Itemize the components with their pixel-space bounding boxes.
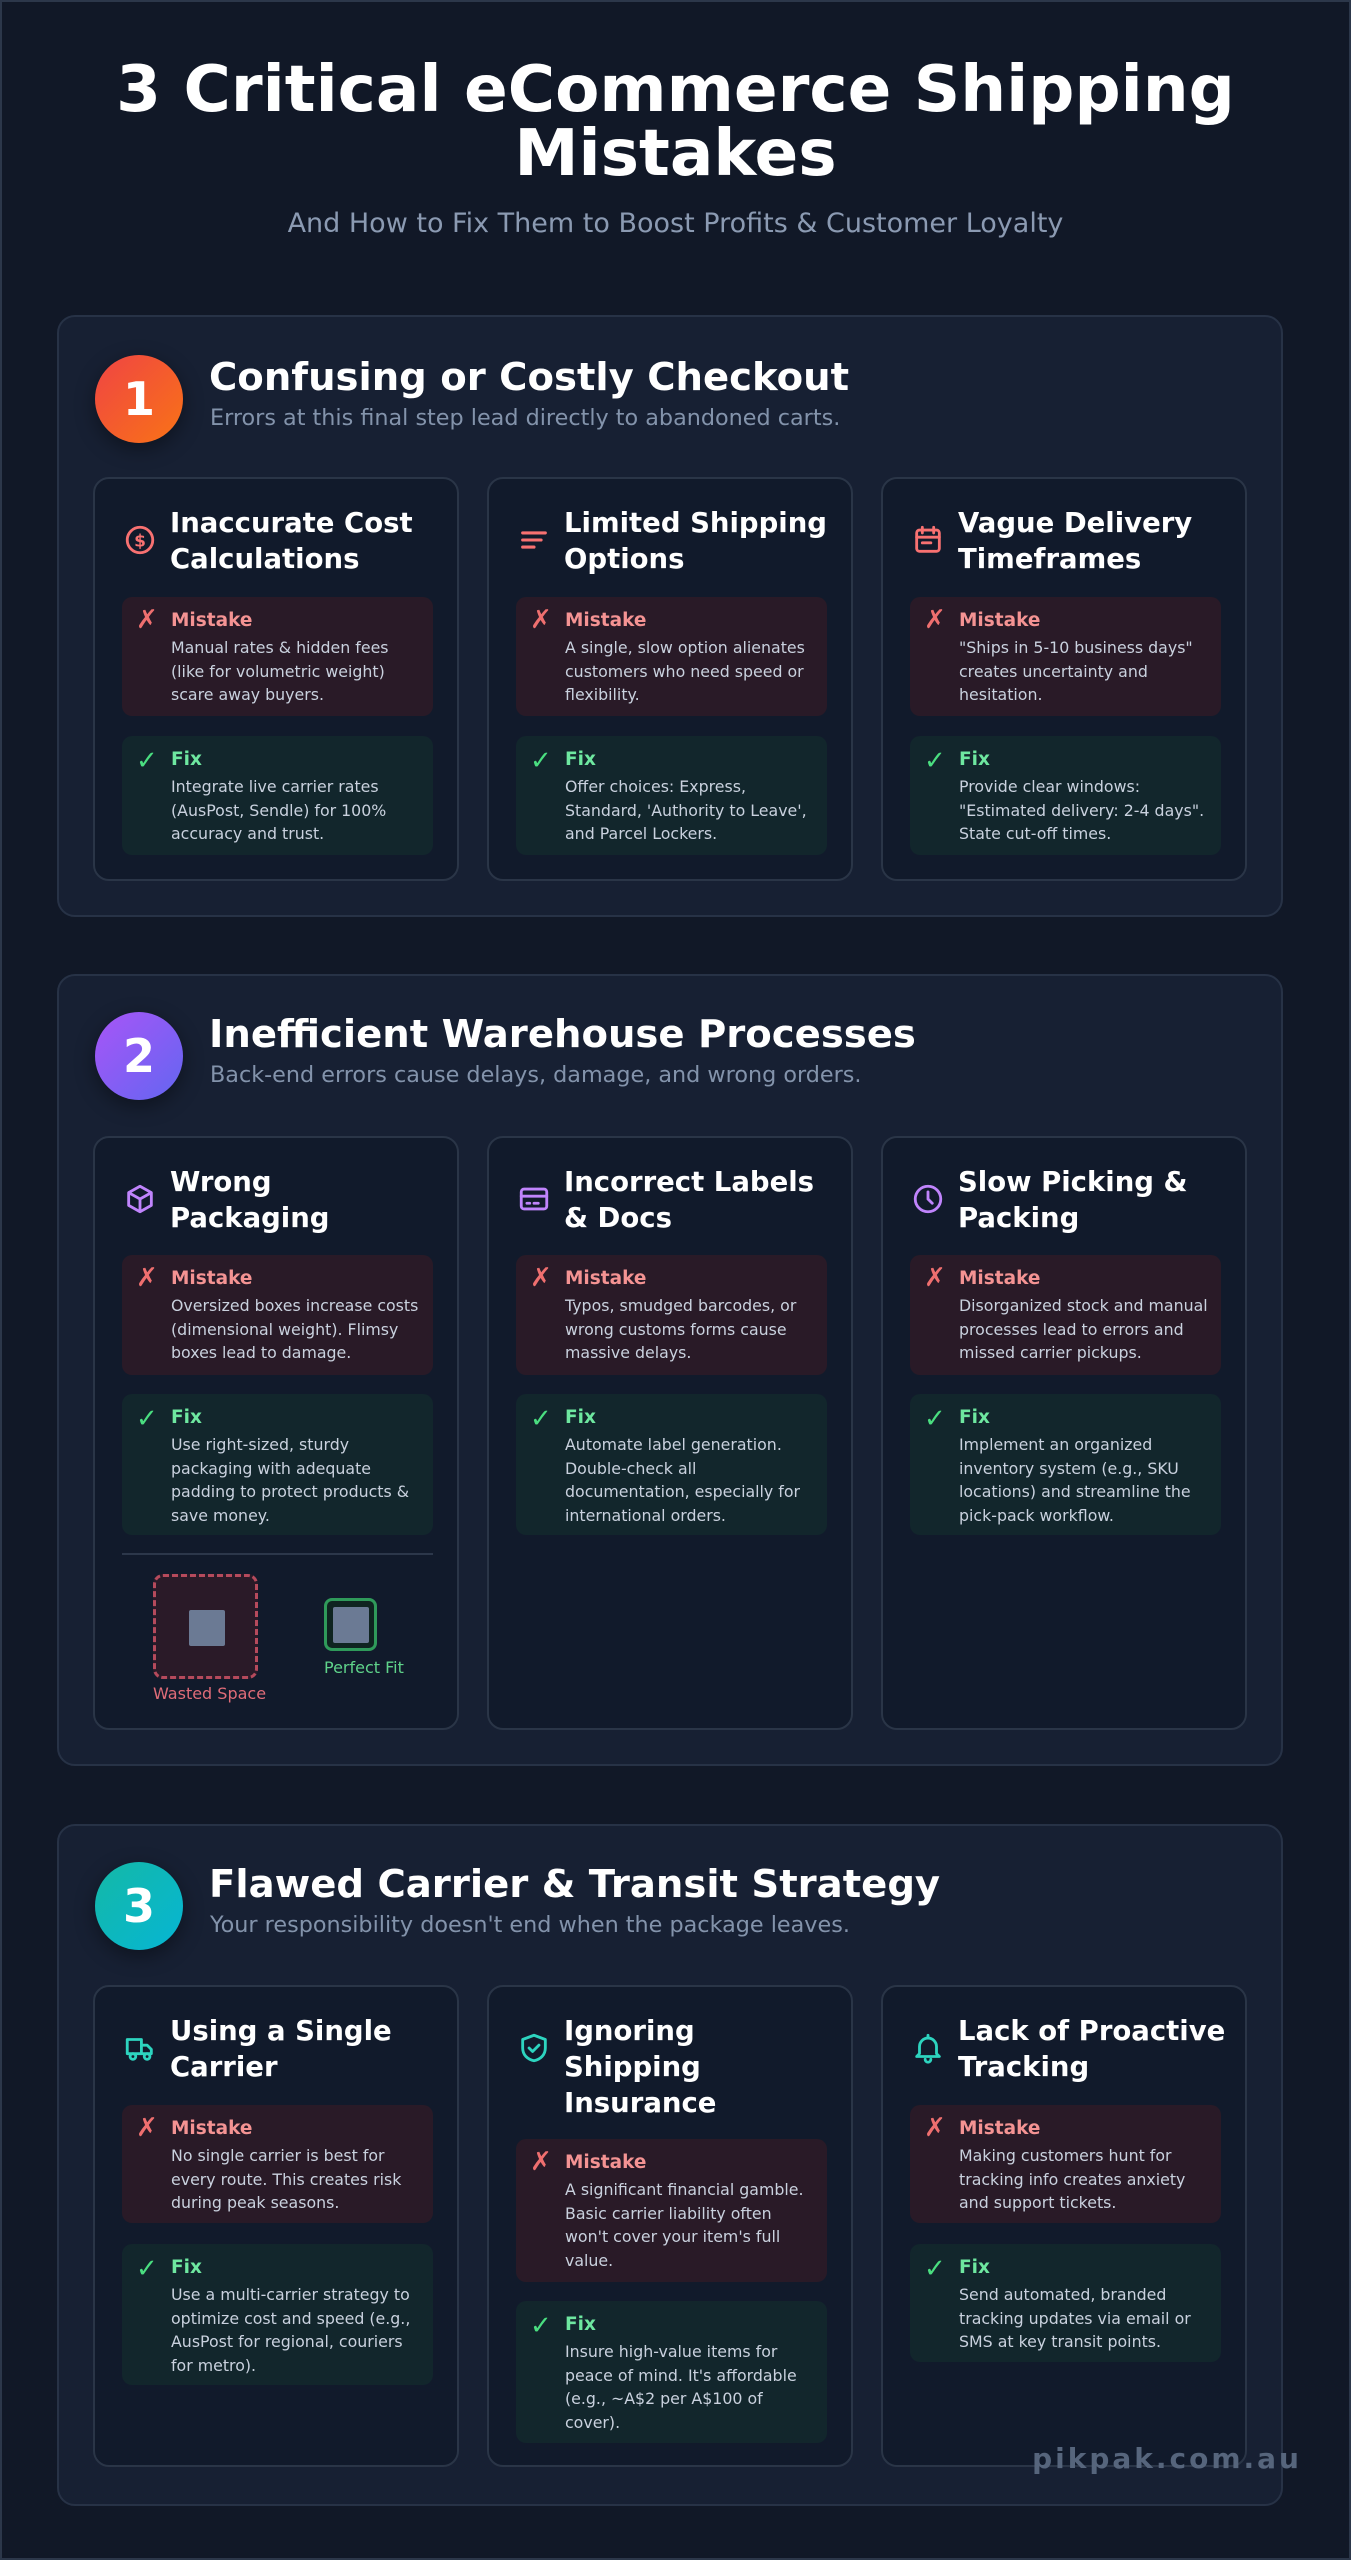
card title: [564, 1166, 814, 1234]
badge 3: [95, 1862, 183, 1950]
title: [116, 52, 1235, 191]
mistake box: [122, 2105, 433, 2223]
badge 1: 1: [123, 372, 155, 426]
card title: [958, 1166, 1188, 1234]
panel: section 1 checkout: [57, 315, 1283, 917]
mistake box: ✗: [136, 605, 158, 635]
icon: box: [127, 1184, 153, 1214]
badge 3: 3: [123, 1879, 155, 1933]
mistake box: "Ships in 5-10 business days": [959, 638, 1193, 657]
fix box: Fix: [565, 1407, 596, 1428]
mistake box: scare away buyers.: [171, 685, 324, 704]
icon: shield: [521, 2034, 547, 2062]
mistake box: Mistake: [565, 610, 646, 631]
mistake box: Mistake: [171, 610, 252, 631]
fix box: ✓: [530, 2311, 552, 2341]
card: proactive tracking: [881, 1985, 1247, 2467]
mistake box: boxes lead to damage.: [171, 1343, 351, 1362]
fix box: tracking updates via email or: [959, 2308, 1191, 2328]
mistake box: [516, 1255, 827, 1375]
fix box: Fix: [171, 749, 202, 770]
watermark: pikpak.com.au: [1032, 2442, 1302, 2475]
mistake box: ✗: [530, 2147, 552, 2177]
mistake box: hesitation.: [959, 685, 1043, 704]
illustration: perfect fit: [324, 1598, 404, 1677]
mistake box: Mistake: [959, 610, 1040, 631]
icon: dollar: [126, 526, 154, 554]
icon: clock: [914, 1184, 942, 1214]
fix box: Use right-sized, sturdy: [171, 1435, 349, 1454]
fix box: [516, 1394, 827, 1535]
fix box: save money.: [171, 1506, 270, 1524]
card title: Lack of Proactive: [958, 2015, 1225, 2047]
mistake box: Mistake: [565, 1268, 646, 1289]
card title: Inaccurate Cost: [170, 507, 413, 539]
fix box: ✓: [530, 1404, 552, 1434]
mistake box: [122, 1255, 433, 1375]
fix box: ✓: [924, 1404, 946, 1434]
mistake box: tracking info creates anxiety: [959, 2170, 1185, 2188]
mistake box: [516, 597, 827, 716]
icon: dollar: $: [134, 531, 146, 551]
fix box: Provide clear windows:: [959, 777, 1140, 796]
mistake box: No single carrier is best for: [171, 2146, 385, 2165]
mistake box: [122, 597, 433, 716]
fix box: [516, 736, 827, 855]
card title: Shipping: [564, 2051, 701, 2083]
fix box: [910, 2244, 1221, 2362]
fix box: inventory system (e.g., SKU: [959, 1458, 1179, 1478]
illustration: wasted space: Wasted Space: [153, 1684, 266, 1703]
card title: Tracking: [958, 2051, 1089, 2083]
fix box: State cut-off times.: [959, 824, 1111, 843]
mistake box: (like for volumetric weight): [171, 662, 385, 680]
mistake box: and support tickets.: [959, 2193, 1116, 2212]
card title: Packaging: [170, 1202, 330, 1234]
fix box: [516, 2301, 827, 2443]
card: inaccurate cost: [93, 477, 459, 881]
mistake box: ✗: [924, 1263, 946, 1293]
badge 2: [95, 1012, 183, 1100]
mistake box: massive delays.: [565, 1343, 691, 1362]
fix box: Fix: [171, 2257, 202, 2278]
title: 3 Critical eCommerce Shipping: [116, 52, 1235, 127]
mistake box: Mistake: [565, 2152, 646, 2173]
fix box: [122, 736, 433, 855]
mistake box: A significant financial gamble.: [565, 2180, 804, 2199]
subtitle: And How to Fix Them to Boost Profits & Customer Loyalty: [288, 208, 1063, 239]
fix box: (e.g., ~A$2 per A$100 of: [565, 2389, 763, 2408]
card: single carrier: [93, 1985, 459, 2467]
fix box: ✓: [924, 2254, 946, 2284]
heading: section 1: Confusing or Costly Checkout: [209, 355, 849, 400]
fix box: Offer choices: Express,: [565, 777, 746, 796]
illustration: wasted space: [153, 1574, 266, 1703]
mistake box: missed carrier pickups.: [959, 1343, 1142, 1362]
fix box: documentation, especially for: [565, 1482, 800, 1501]
mistake box: creates uncertainty and: [959, 662, 1148, 680]
fix box: Double-check all: [565, 1458, 696, 1478]
heading: section 3: Flawed Carrier & Transit Strategy: [209, 1862, 940, 1907]
icon: bell: [915, 2034, 941, 2064]
illustration: perfect fit: Perfect Fit: [324, 1658, 404, 1677]
card title: Carrier: [170, 2051, 278, 2083]
mistake box: Typos, smudged barcodes, or: [565, 1296, 796, 1315]
panel: section 2 warehouse: [57, 974, 1283, 1766]
heading: section 2: Inefficient Warehouse Processes: [209, 1012, 916, 1057]
mistake box: Mistake: [959, 1268, 1040, 1289]
fix box: optimize cost and speed (e.g.,: [171, 2308, 410, 2328]
card title: Options: [564, 543, 684, 575]
fix box: Fix: [171, 1407, 202, 1428]
fix box: [122, 1394, 433, 1535]
mistake box: flexibility.: [565, 685, 640, 704]
fix box: Automate label generation.: [565, 1435, 782, 1454]
fix box: ✓: [136, 746, 158, 776]
mistake box: customers who need speed or: [565, 662, 804, 680]
subheading: section 2: Back-end errors cause delays, damage, and wrong orders.: [210, 1062, 862, 1088]
mistake box: ✗: [530, 605, 552, 635]
fix box: [910, 1394, 1221, 1535]
mistake box: value.: [565, 2250, 613, 2270]
fix box: Standard, 'Authority to Leave',: [565, 800, 807, 820]
mistake box: (dimensional weight). Flimsy: [171, 1320, 398, 1338]
mistake box: Manual rates & hidden fees: [171, 638, 389, 657]
card title: Insurance: [564, 2087, 716, 2119]
icon: truck: [126, 2038, 153, 2061]
mistake box: during peak seasons.: [171, 2193, 339, 2212]
card title: Timeframes: [958, 543, 1141, 575]
fix box: Fix: [959, 749, 990, 770]
card title: [564, 507, 827, 575]
badge 2: 2: [123, 1029, 155, 1083]
mistake box: ✗: [136, 1263, 158, 1293]
mistake box: [910, 1255, 1221, 1375]
card title: Ignoring: [564, 2015, 695, 2047]
icon: card: [520, 1188, 548, 1210]
mistake box: Disorganized stock and manual: [959, 1296, 1208, 1315]
fix box: Fix: [959, 1407, 990, 1428]
card: slow picking: [881, 1136, 1247, 1730]
fix box: cover).: [565, 2412, 620, 2432]
fix box: padding to protect products &: [171, 1482, 409, 1501]
card title: Calculations: [170, 543, 359, 575]
subheading: section 1: Errors at this final step lead directly to abandoned carts.: [210, 405, 840, 431]
mistake box: [910, 2105, 1221, 2223]
subheading: section 3: Your responsibility doesn't end when the package leaves.: [210, 1912, 850, 1938]
card title: [170, 1166, 330, 1234]
fix box: ✓: [136, 2254, 158, 2284]
fix box: ✓: [530, 746, 552, 776]
fix box: [910, 736, 1221, 855]
mistake box: Oversized boxes increase costs: [171, 1296, 418, 1315]
fix box: locations) and streamline the: [959, 1482, 1191, 1501]
icon: lines: [521, 531, 547, 549]
fix box: Fix: [959, 2257, 990, 2278]
fix box: Insure high-value items for: [565, 2342, 777, 2361]
fix box: pick-pack workflow.: [959, 1506, 1114, 1524]
card title: [170, 2015, 392, 2083]
mistake box: A single, slow option alienates: [565, 638, 805, 657]
mistake box: Making customers hunt for: [959, 2146, 1172, 2165]
card title: Limited Shipping: [564, 507, 827, 539]
fix box: ✓: [136, 1404, 158, 1434]
mistake box: Mistake: [959, 2118, 1040, 2139]
fix box: Use a multi-carrier strategy to: [171, 2285, 410, 2304]
card title: [564, 2015, 716, 2119]
mistake box: ✗: [136, 2113, 158, 2143]
mistake box: Mistake: [171, 1268, 252, 1289]
mistake box: processes lead to errors and: [959, 1320, 1184, 1338]
card: limited shipping options: [487, 477, 853, 881]
card title: Packing: [958, 1202, 1079, 1234]
mistake box: ✗: [924, 2113, 946, 2143]
mistake box: ✗: [530, 1263, 552, 1293]
fix box: ✓: [924, 746, 946, 776]
card: vague delivery: [881, 477, 1247, 881]
fix box: and Parcel Lockers.: [565, 824, 717, 843]
fix box: AusPost for regional, couriers: [171, 2332, 403, 2351]
card title: [170, 507, 413, 575]
fix box: [122, 2244, 433, 2385]
fix box: peace of mind. It's affordable: [565, 2366, 797, 2384]
mistake box: won't cover your item's full: [565, 2227, 780, 2246]
fix box: Implement an organized: [959, 1435, 1152, 1454]
panel: section 3 carrier: [57, 1824, 1283, 2506]
card title: Incorrect Labels: [564, 1166, 814, 1198]
card title: [958, 507, 1192, 575]
card title: & Docs: [564, 1202, 672, 1234]
fix box: accuracy and trust.: [171, 824, 324, 843]
card title: Wrong: [170, 1166, 272, 1198]
fix box: for metro).: [171, 2356, 256, 2374]
card: wrong packaging: [93, 1136, 459, 1730]
card title: Slow Picking &: [958, 1166, 1188, 1198]
card title: [958, 2015, 1225, 2083]
mistake box: Mistake: [171, 2118, 252, 2139]
fix box: (AusPost, Sendle) for 100%: [171, 800, 386, 820]
mistake box: wrong customs forms cause: [565, 1320, 787, 1338]
card: shipping insurance: [487, 1985, 853, 2467]
fix box: "Estimated delivery: 2-4 days".: [959, 800, 1204, 820]
fix box: Integrate live carrier rates: [171, 777, 379, 796]
icon: calendar: [915, 526, 941, 553]
mistake box: ✗: [924, 605, 946, 635]
card: incorrect labels: [487, 1136, 853, 1730]
fix box: Fix: [565, 749, 596, 770]
mistake box: [910, 597, 1221, 716]
badge 1: [95, 355, 183, 443]
title: Mistakes: [514, 116, 837, 191]
fix box: Fix: [565, 2314, 596, 2335]
card title: Vague Delivery: [958, 507, 1192, 539]
mistake box: every route. This creates risk: [171, 2170, 401, 2188]
fix box: Send automated, branded: [959, 2285, 1166, 2304]
fix box: packaging with adequate: [171, 1458, 371, 1478]
fix box: international orders.: [565, 1506, 726, 1524]
card title: Using a Single: [170, 2015, 392, 2047]
mistake box: Basic carrier liability often: [565, 2204, 772, 2222]
fix box: SMS at key transit points.: [959, 2332, 1161, 2351]
mistake box: [516, 2139, 827, 2282]
